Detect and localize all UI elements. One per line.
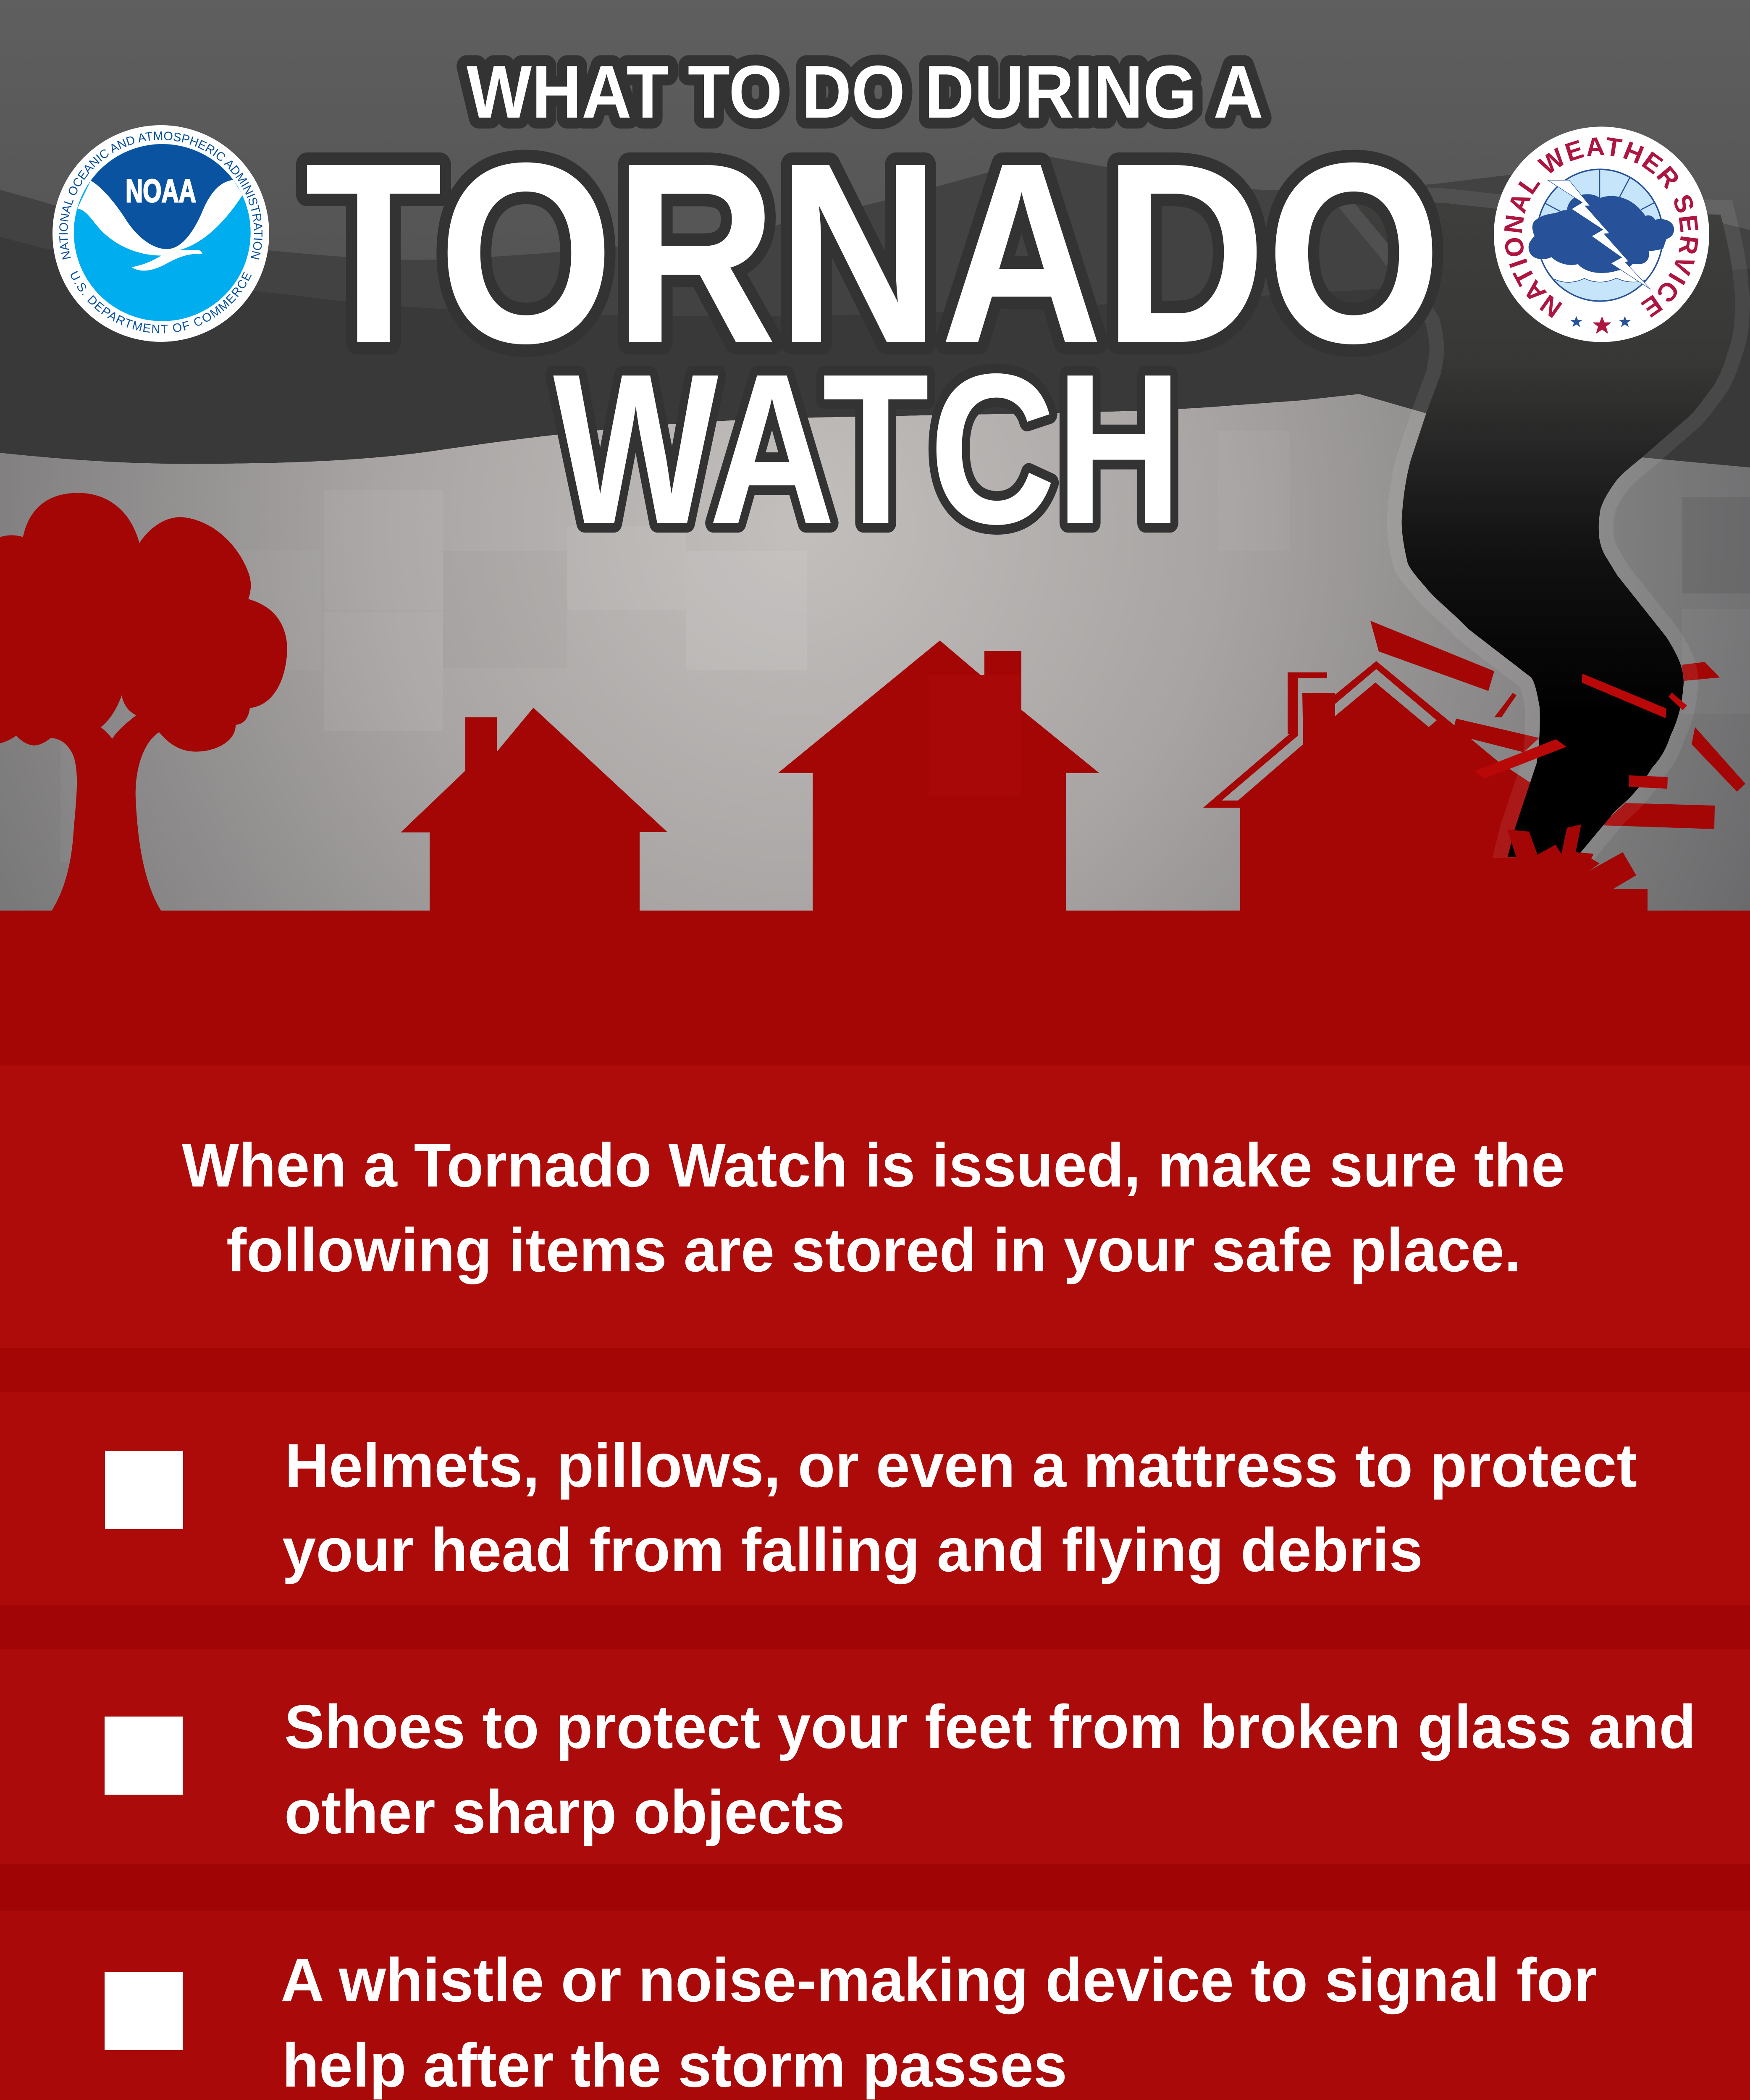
house 1 [401,708,667,911]
house 2 [778,640,1099,911]
panel: helmets [0,1392,1750,1605]
house 3 with torn roof [1203,661,1554,911]
heading: tornado: TORNADO [304,109,1442,396]
panel: intro [0,1066,1750,1348]
tree silhouette [0,493,287,912]
checkbox [105,1717,183,1795]
item text: your head from falling and flying debris [282,1516,1423,1585]
seal ring text bottom: U.S. DEPARTMENT OF COMMERCE [67,269,255,336]
seal ring text top: NATIONAL OCEANIC AND ATMOSPHERIC ADMINISTRATION [57,129,265,261]
item text [284,1693,1696,1847]
NOAA wordmark: NOAA [126,173,196,209]
logo: National Weather Service [1494,127,1709,342]
panel: whistle [0,1911,1750,2100]
title [304,50,1442,569]
kicker: what to do during a: WHAT TO DO DURING A [467,50,1263,134]
light storm backdrop with tiles [0,378,1750,911]
dark storm clouds [0,0,1750,467]
heading: watch: WATCH [553,329,1182,569]
intro text: When a Tornado Watch is issued, make sure the [182,1131,1565,1200]
red background [0,911,1750,2100]
red ground [0,911,1750,1066]
debris behind tornado [1370,621,1745,829]
checkbox [105,1972,183,2050]
item text: Shoes to protect your feet from broken glass and [284,1693,1696,1761]
NWS seal artwork [1529,169,1674,334]
item text: Helmets, pillows, or even a mattress to protect [285,1431,1637,1500]
tornado funnel [1351,199,1735,857]
panel: shoes [0,1649,1750,1864]
item text: A whistle or noise-making device to signal for [281,1946,1597,2015]
intro text: following items are stored in your safe place. [226,1216,1521,1285]
seal ring text: NATIONAL WEATHER SERVICE [1499,132,1704,323]
item text [281,1946,1597,2100]
intro text [182,1131,1565,1285]
item text: other sharp objects [284,1778,845,1847]
item text [282,1431,1637,1585]
debris in front of tornado [1386,674,1687,911]
header scene [0,0,1750,1066]
logo: NOAA [52,125,269,342]
NOAA seal artwork [74,144,251,321]
checkbox [105,1451,183,1529]
item text: help after the storm passes [282,2031,1067,2100]
